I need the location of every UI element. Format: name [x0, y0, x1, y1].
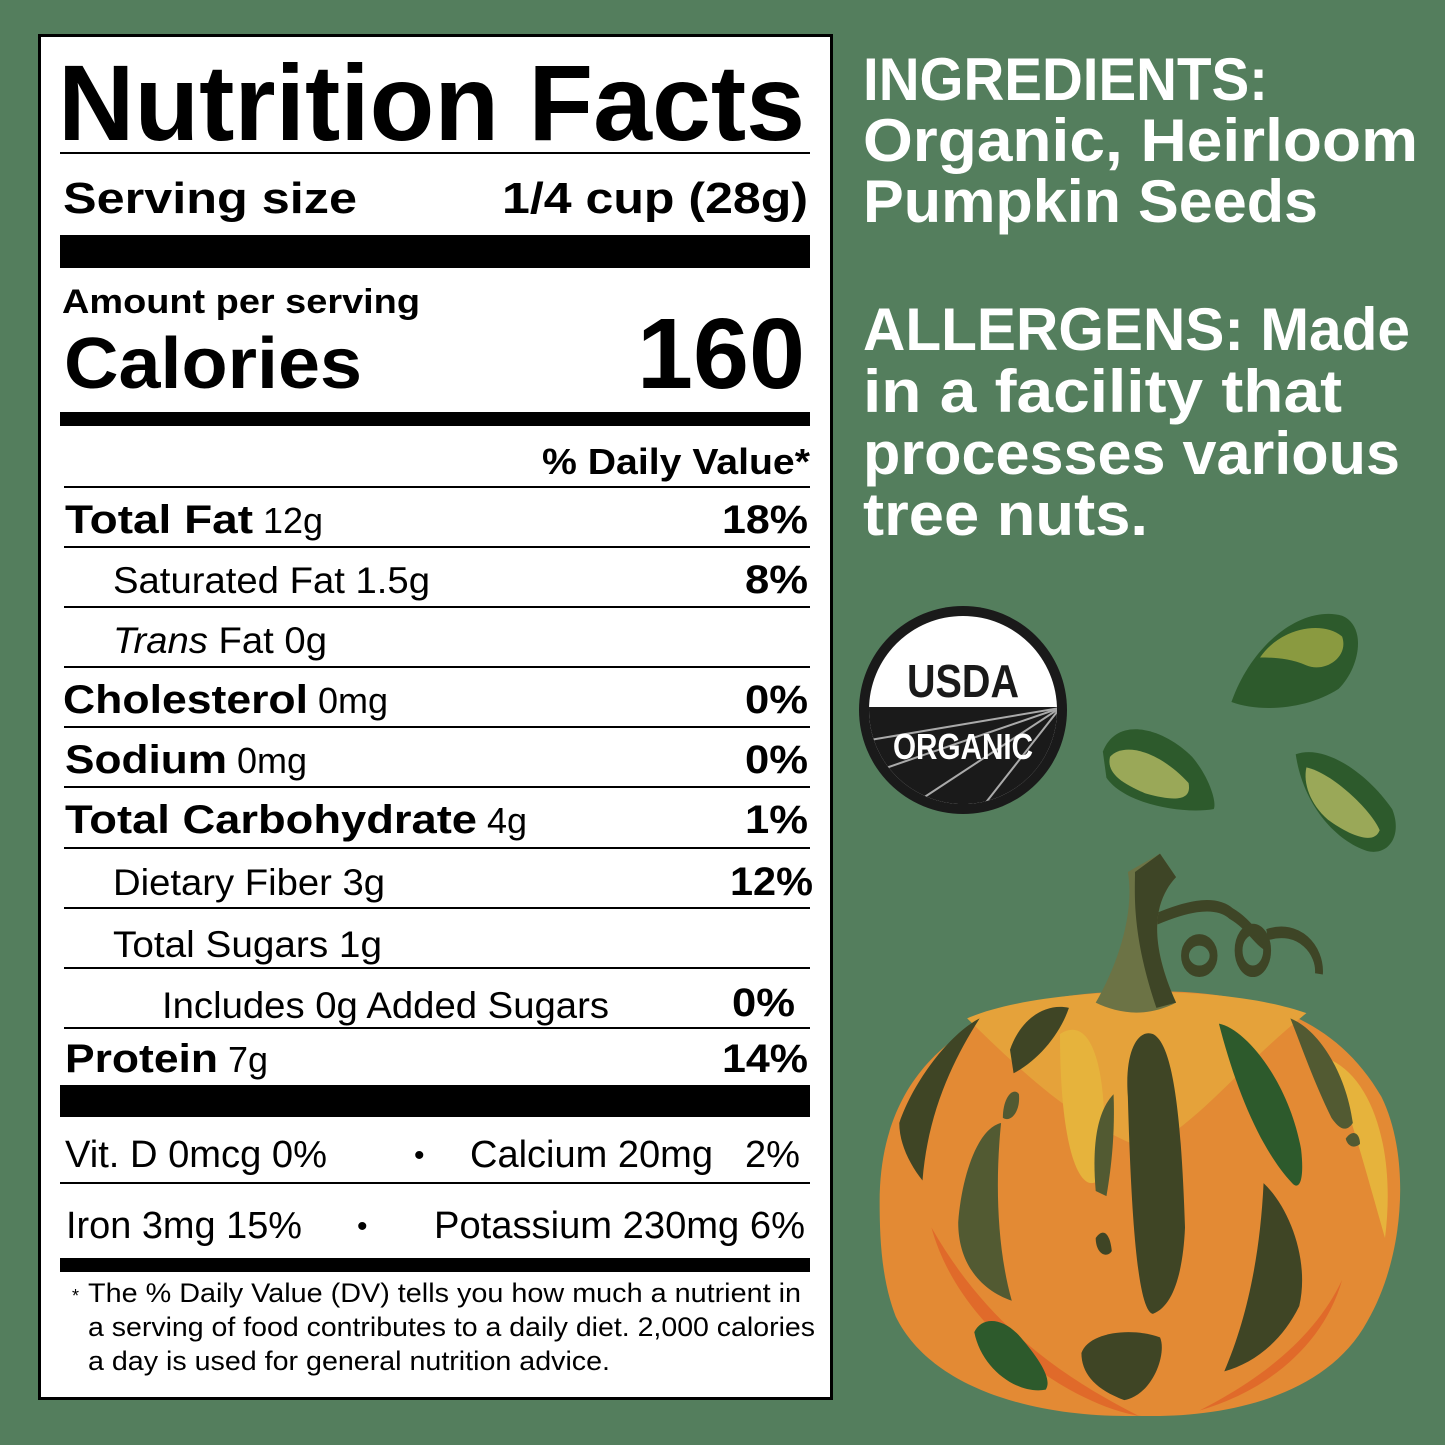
nutrient rows: Protein 7g	[65, 1037, 268, 1081]
nutrient rows: Total Sugars 1g	[113, 924, 382, 965]
nutrient rows: 0%	[745, 738, 808, 782]
footnote: The % Daily Value (DV) tells you how much a nutrient in	[88, 1278, 801, 1308]
icon: seed left	[1103, 729, 1214, 810]
nutrient rows: 0%	[745, 678, 808, 722]
nutrient rows: Cholesterol 0mg	[63, 678, 388, 722]
icon: USDA organic seal: ORGANIC	[893, 726, 1033, 767]
vitamins and minerals	[60, 1134, 810, 1247]
footnote: a day is used for general nutrition advice.	[88, 1346, 610, 1376]
allergens text	[863, 296, 1410, 548]
nutrient rows: 0%	[732, 981, 795, 1025]
allergens text: in a facility that	[863, 358, 1342, 425]
calories block	[62, 283, 805, 410]
allergens text: ALLERGENS: Made	[863, 296, 1410, 363]
nutrient rows: Saturated Fat 1.5g	[113, 560, 430, 601]
vitamins and minerals: Calcium 20mg	[470, 1134, 713, 1176]
calories block: Amount per serving	[62, 283, 420, 321]
vitamins and minerals: Vit. D 0mcg 0%	[65, 1134, 327, 1176]
icon: USDA organic seal: USDA	[907, 655, 1019, 707]
footnote	[72, 1278, 815, 1376]
nutrient rows: Dietary Fiber 3g	[113, 862, 385, 903]
nutrient rows	[63, 498, 813, 1081]
serving size row: 1/4 cup (28g)	[502, 174, 808, 223]
allergens text: tree nuts.	[863, 481, 1148, 548]
ingredients text: Organic, Heirloom	[863, 107, 1418, 174]
ingredients text: Pumpkin Seeds	[863, 168, 1318, 235]
nutrient rows: Sodium 0mg	[65, 738, 307, 782]
icon: seed right	[1296, 752, 1396, 852]
panel: nutrition facts label	[40, 36, 832, 1398]
title: Nutrition Facts	[58, 42, 805, 163]
nutrient rows: 18%	[722, 498, 808, 542]
icon: seed top	[1231, 614, 1358, 708]
ingredients text: INGREDIENTS:	[863, 46, 1268, 113]
footnote: a serving of food contributes to a daily diet. 2,000 calories	[88, 1312, 815, 1342]
icon: USDA organic seal	[859, 606, 1070, 817]
illustration: seeds and pumpkin	[880, 614, 1400, 1416]
allergens text: processes various	[863, 420, 1400, 487]
nutrient rows: Includes 0g Added Sugars	[162, 985, 609, 1026]
nutrient rows: 8%	[745, 558, 808, 602]
nutrient rows: Total Fat 12g	[65, 498, 323, 542]
nutrient rows: Total Carbohydrate 4g	[65, 798, 527, 842]
nutrient rows: 1%	[745, 798, 808, 842]
vitamins and minerals: •	[357, 1210, 368, 1243]
daily value header: % Daily Value*	[542, 441, 810, 482]
serving size row	[63, 174, 808, 223]
vitamins and minerals: •	[414, 1139, 425, 1172]
nutrient rows: Trans Fat 0g	[113, 620, 327, 661]
vitamins and minerals: Potassium 230mg 6%	[434, 1205, 805, 1247]
vitamins and minerals: Iron 3mg 15%	[66, 1205, 302, 1247]
nutrient rows: 12%	[730, 860, 813, 904]
footnote: *	[72, 1286, 79, 1306]
icon: pumpkin	[880, 854, 1400, 1416]
calories block: 160	[637, 298, 805, 410]
ingredients text	[863, 46, 1418, 235]
nutrient rows: 14%	[722, 1037, 808, 1081]
serving size row: Serving size	[63, 174, 357, 223]
vitamins and minerals: 2%	[745, 1134, 800, 1176]
calories block: Calories	[64, 324, 362, 404]
